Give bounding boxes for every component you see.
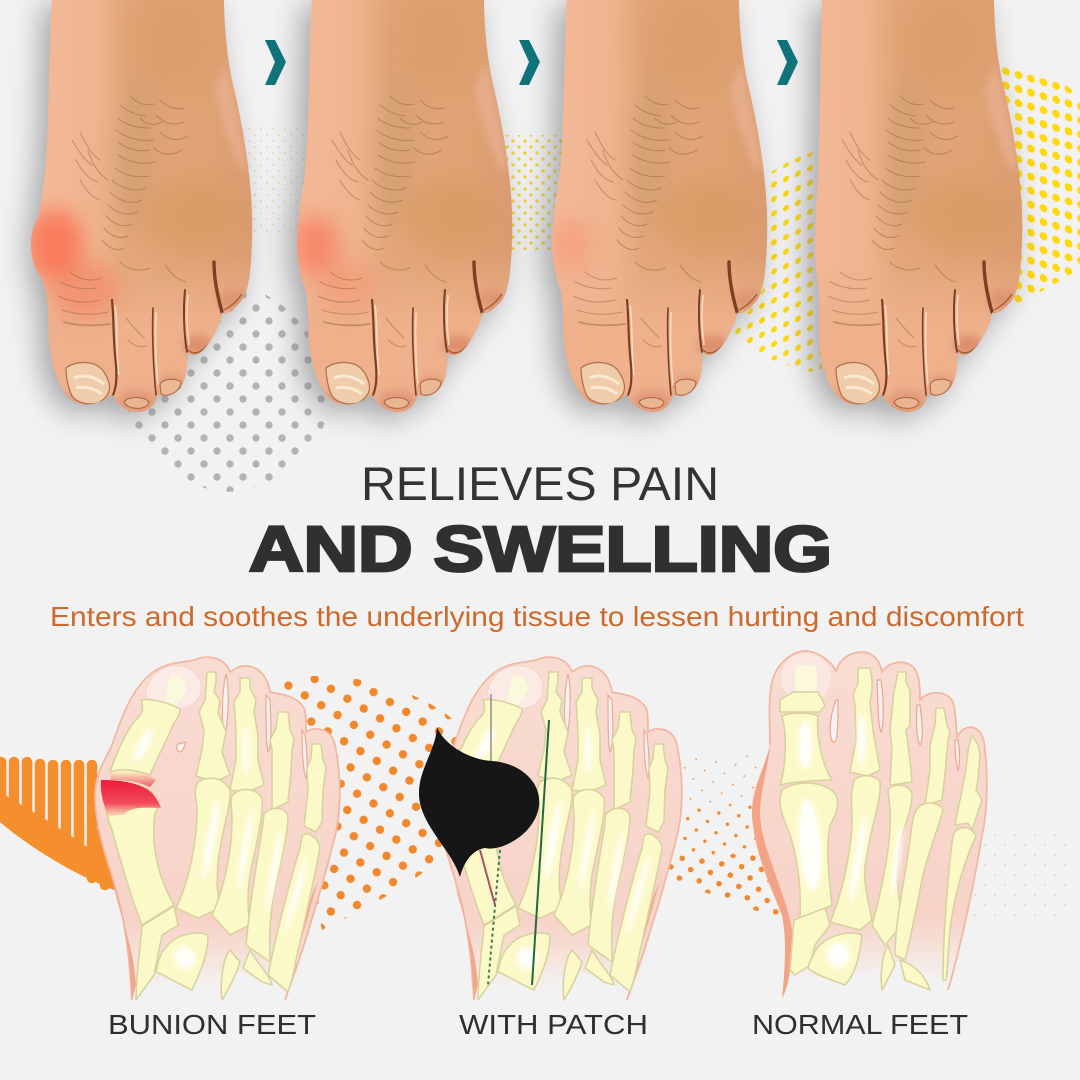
skin edge left: [95, 657, 340, 1000]
skin edge shading: [752, 745, 792, 998]
dotted pattern: faint tan dots: [245, 125, 310, 235]
dotted pattern: yellow crescent: [1002, 67, 1080, 303]
inflamed joint in red: [101, 771, 161, 818]
alignment lines: [480, 694, 549, 985]
label: with patch: WITH PATCH: [459, 1009, 648, 1040]
black patch: [419, 727, 539, 877]
foot photo 3: mild redness: [535, 0, 785, 420]
arrow chevron 3: [777, 40, 798, 85]
bones: [780, 668, 982, 990]
orange faint dots right: [925, 830, 1070, 920]
orange dotted fan: between patch foot and normal foot: [668, 755, 783, 925]
dotted pattern: yellow small: [505, 135, 565, 250]
orange dotted fan: between bunion foot and patch foot: [284, 676, 456, 930]
dotted pattern: gray behind first foot: [128, 292, 325, 492]
label: normal feet: NORMAL FEET: [752, 1009, 968, 1040]
toe gaps: [830, 680, 960, 770]
flesh and bones: [437, 657, 682, 1005]
foot photo 2: reduced redness: [280, 0, 530, 420]
foot photo 4: healed: [790, 0, 1040, 420]
subtitle: Enters and soothes the underlying tissue to lessen hurting and discomfort: [50, 601, 1024, 632]
toe gaps: [177, 674, 307, 778]
skeleton foot: bunion: [95, 657, 340, 1005]
nail highlight: [781, 653, 831, 703]
label: bunion feet: BUNION FEET: [108, 1009, 316, 1040]
orange dotted swoosh: far left: [0, 762, 125, 892]
foot photo 1: strongest bunion redness: [20, 0, 270, 420]
heading line 2: AND SWELLING: [249, 513, 832, 585]
flesh outline: [95, 657, 340, 1005]
arrow chevron 2: [519, 40, 540, 85]
skeleton foot: normal: [752, 651, 987, 998]
flesh outline: [752, 651, 987, 998]
tapered orange side shading: [113, 880, 318, 1000]
skeleton foot: with patch: [419, 657, 682, 1005]
arrow chevron 1: [265, 40, 286, 85]
outline stroke: [770, 651, 987, 990]
heading line 1: RELIEVES PAIN: [361, 457, 719, 510]
dotted pattern: yellow medium: [734, 152, 822, 372]
